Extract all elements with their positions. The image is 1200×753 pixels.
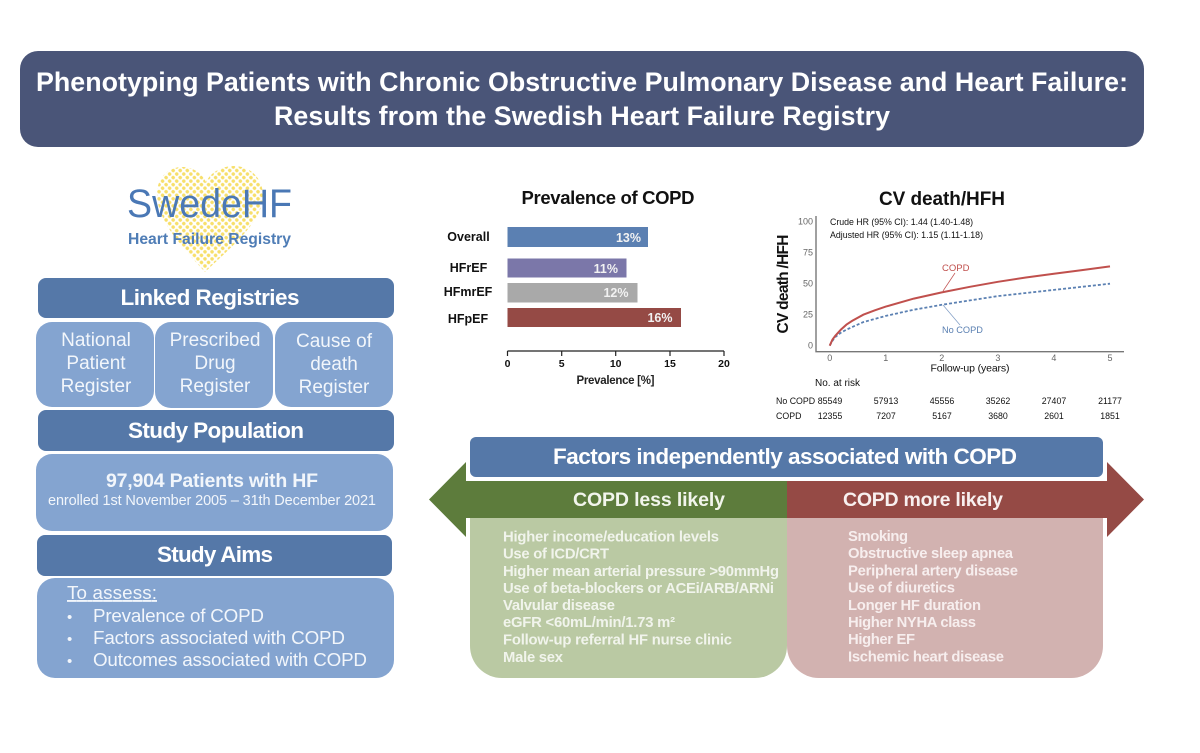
panel: COPD more likely list: Higher EF [848, 632, 915, 648]
panel: COPD more likely list [787, 518, 1103, 678]
x tick labels: 4 [1051, 353, 1056, 363]
panel: COPD less likely list: Use of beta-blockers or ACEi/ARB/ARNi [503, 581, 774, 597]
card: cause of death register: death [310, 354, 358, 375]
chart heading: Prevalence of COPD [522, 187, 694, 208]
card: aims list: Prevalence of COPD [93, 605, 264, 626]
heading: study population [38, 410, 394, 451]
card: prescribed drug register [155, 322, 273, 408]
arrow: COPD more likely: COPD more likely [843, 489, 1003, 511]
arrow: COPD less likely [429, 462, 787, 537]
bar chart: prevalence of COPD [444, 187, 730, 387]
y tick labels: 0 [808, 341, 813, 351]
card: aims list: • [67, 631, 72, 648]
chart heading: CV death/HFH [879, 189, 1005, 210]
title banner: Phenotyping Patients with Chronic Obstructive Pulmonary Disease and Heart Failure: [36, 67, 1128, 97]
numbers at risk table: No. at risk [815, 378, 861, 389]
panel: COPD more likely list: Longer HF duration [848, 598, 981, 614]
bar: HFpEF 16%: HFpEF [448, 312, 488, 326]
card: prescribed drug register: Drug [194, 353, 236, 374]
card: patient count: 97,904 Patients with HF [106, 470, 318, 492]
panel: COPD less likely list: Higher income/education levels [503, 530, 719, 546]
logo: SwedeHF: SwedeHF [127, 182, 292, 226]
numbers at risk table: 35262 [986, 396, 1010, 406]
y axis label: CV death /HFH [775, 234, 792, 334]
heading: study aims [37, 535, 392, 576]
heading: factors independently associated: Factors independently associated with COPD [553, 444, 1017, 469]
label: no COPD [942, 305, 983, 335]
curve: no COPD [830, 284, 1110, 346]
card: aims list: To assess: [67, 582, 157, 603]
card: cause of death register [275, 322, 393, 407]
x axis [505, 351, 730, 387]
numbers at risk table: 21177 [1098, 396, 1122, 406]
label: COPD [942, 263, 970, 291]
heading: linked registries [38, 278, 394, 318]
panel: factors associated with COPD [429, 437, 1144, 678]
x axis: 20 [718, 358, 730, 370]
label: no COPD: No COPD [942, 325, 983, 335]
numbers at risk table: 85549 [818, 396, 842, 406]
numbers at risk table: 27407 [1042, 396, 1066, 406]
panel: study aims [37, 535, 394, 678]
card: patient count [36, 454, 393, 531]
numbers at risk table: 2601 [1044, 411, 1064, 421]
card: cause of death register: Cause of [296, 331, 373, 352]
panel: COPD more likely list: Peripheral artery disease [848, 564, 1018, 580]
card: cause of death register: Register [299, 377, 370, 398]
line chart: CV death/HFH [775, 189, 1124, 421]
numbers at risk table: No COPD [776, 396, 815, 406]
numbers at risk table: 45556 [930, 396, 954, 406]
axes [816, 216, 1124, 352]
card: national patient register: National [61, 330, 131, 351]
icon: dotted yellow heart [157, 166, 263, 272]
card: national patient register [36, 322, 154, 407]
panel: COPD more likely list: Use of diuretics [848, 580, 955, 596]
card: national patient register: Register [61, 376, 132, 397]
title banner: Results from the Swedish Heart Failure Registry [274, 101, 890, 131]
panel: COPD less likely list: Valvular disease [503, 598, 615, 614]
x tick labels: 5 [1107, 353, 1113, 363]
arrow: COPD less likely: COPD less likely [573, 489, 725, 511]
curve: COPD [830, 266, 1110, 346]
bar: overall 13%: Overall [447, 230, 490, 244]
panel: linked registries [36, 278, 394, 408]
card: patient count: enrolled 1st November 2005 – 31th December 2021 [48, 493, 376, 509]
panel: COPD less likely list: Male sex [503, 650, 564, 666]
card: aims list: Factors associated with COPD [93, 627, 345, 648]
title banner [20, 51, 1144, 147]
numbers at risk table: 12355 [818, 411, 842, 421]
logo: SwedeHF [127, 166, 292, 272]
numbers at risk table: COPD [776, 411, 801, 421]
heading: factors independently associated [470, 437, 1103, 477]
bar: HFrEF 11%: 11% [594, 262, 618, 276]
x axis: Prevalence [%] [576, 375, 655, 387]
panel: study population [36, 410, 394, 531]
panel: COPD less likely list [470, 518, 787, 678]
bar: HFrEF 11% [450, 258, 626, 278]
x tick labels: 0 [827, 353, 832, 363]
bar: HFmrEF 12%: HFmrEF [444, 285, 493, 299]
x tick labels: 1 [883, 353, 888, 363]
bar: HFrEF 11%: HFrEF [450, 261, 488, 275]
x tick labels: 3 [995, 353, 1000, 363]
y tick labels: 50 [803, 279, 813, 289]
x tick labels [827, 353, 1113, 363]
numbers at risk table: 1851 [1100, 411, 1120, 421]
card: aims list: • [67, 653, 72, 670]
numbers at risk table: 3680 [988, 411, 1008, 421]
heading: linked registries: Linked Registries [120, 285, 300, 310]
bar: HFpEF 16% [448, 308, 681, 327]
panel: COPD more likely list: Smoking [848, 529, 908, 545]
numbers at risk table: 7207 [876, 411, 896, 421]
x axis: 5 [559, 358, 565, 370]
numbers at risk table: 5167 [932, 411, 952, 421]
card: prescribed drug register: Prescribed [170, 330, 260, 351]
x axis label: Follow-up (years) [930, 362, 1010, 374]
hazard ratios: Crude HR (95% CI): 1.44 (1.40-1.48) [830, 217, 973, 227]
label: COPD: COPD [942, 263, 970, 274]
logo: SwedeHF: Heart Failure Registry [128, 231, 291, 248]
panel: COPD more likely list: Obstructive sleep apnea [848, 546, 1014, 562]
x axis: 10 [610, 358, 622, 370]
bar: overall 13%: 13% [616, 231, 641, 245]
panel: COPD less likely list: eGFR <60mL/min/1.73 m² [503, 615, 675, 631]
y tick labels: 25 [803, 310, 813, 320]
card: prescribed drug register: Register [180, 376, 251, 397]
y tick labels [798, 217, 813, 351]
card: aims list [37, 578, 394, 678]
card: aims list: • [67, 609, 72, 626]
bar: HFmrEF 12%: 12% [603, 286, 628, 300]
x axis: 15 [664, 358, 676, 370]
y tick labels: 75 [803, 248, 813, 258]
panel: COPD more likely list: Ischemic heart disease [848, 650, 1004, 666]
numbers at risk table: 57913 [874, 396, 898, 406]
x axis: 0 [505, 358, 511, 370]
bar: overall 13% [447, 227, 648, 247]
heading: study population: Study Population [128, 418, 304, 443]
numbers at risk table [776, 378, 1122, 421]
x tick labels: 2 [939, 353, 944, 363]
panel: COPD more likely list: Higher NYHA class [848, 615, 976, 631]
bar: HFpEF 16%: 16% [647, 311, 672, 325]
arrow: COPD more likely [787, 462, 1144, 537]
panel: COPD less likely list: Use of ICD/CRT [503, 546, 609, 562]
panel: COPD less likely list: Follow-up referral HF nurse clinic [503, 632, 732, 648]
card: national patient register: Patient [66, 353, 126, 374]
heading: study aims: Study Aims [157, 542, 273, 567]
bar: HFmrEF 12% [444, 283, 638, 302]
hazard ratios [830, 217, 983, 240]
y tick labels: 100 [798, 217, 813, 227]
hazard ratios: Adjusted HR (95% CI): 1.15 (1.11-1.18) [830, 230, 983, 240]
panel: COPD less likely list: Higher mean arterial pressure >90mmHg [503, 564, 779, 580]
card: aims list: Outcomes associated with COPD [93, 649, 367, 670]
